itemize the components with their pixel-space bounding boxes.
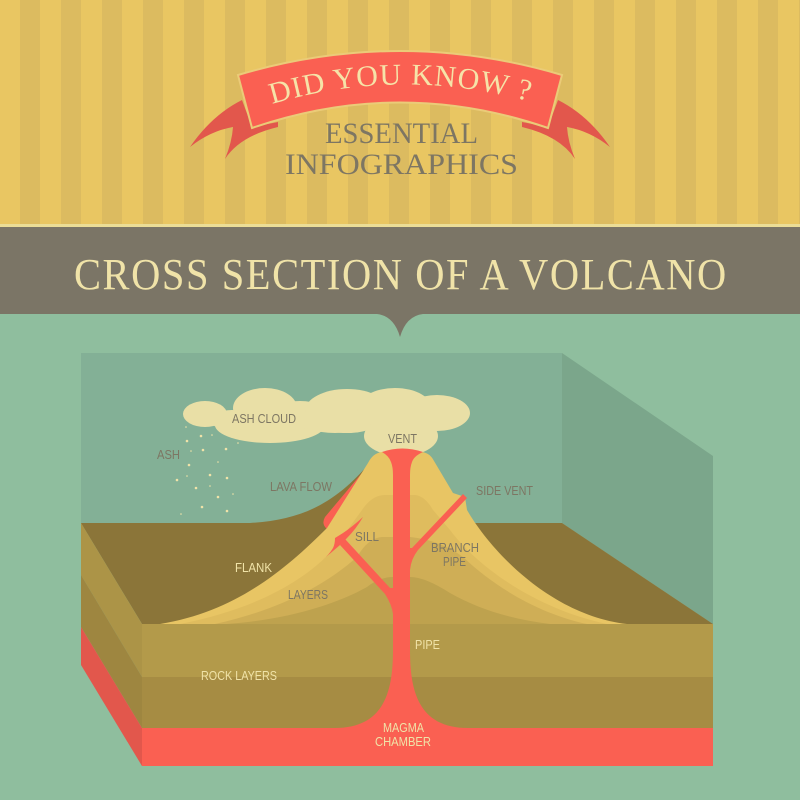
label: lava flow: LAVA FLOW (270, 480, 332, 494)
volcano second layer (180, 495, 607, 624)
magma chamber (142, 728, 713, 766)
front upper rock layer (142, 624, 713, 677)
volcano outer layer (160, 452, 627, 624)
branch pipe to side vent (410, 494, 467, 570)
ash cloud (183, 388, 470, 456)
ground surface (81, 523, 713, 624)
ash particles (176, 426, 239, 515)
label: magma chamber (375, 721, 431, 749)
volcano third layer (215, 537, 587, 624)
back wall (81, 353, 562, 523)
label: vent: VENT (388, 432, 417, 446)
label: branch pipe: BRANCH (431, 541, 479, 555)
label: side vent: SIDE VENT (476, 484, 533, 498)
lava flow (323, 461, 380, 529)
label: branch pipe: PIPE (443, 555, 466, 569)
heading: essential infographics: INFOGRAPHICS (285, 148, 518, 181)
label: magma chamber: MAGMA (383, 721, 425, 735)
ribbon text: DID YOU KNOW ? (268, 64, 532, 104)
chart: volcano cross section block (81, 353, 713, 766)
front lower rock layer (142, 677, 713, 728)
volcano inner layer (227, 577, 550, 624)
label: ash cloud: ASH CLOUD (232, 412, 296, 426)
ribbon right tail (522, 100, 610, 159)
title: CROSS SECTION OF A VOLCANO (74, 250, 726, 299)
panel: striped yellow header (0, 0, 800, 227)
label: rock layers: ROCK LAYERS (201, 669, 277, 683)
label: ash: ASH (157, 448, 180, 462)
sill (322, 517, 363, 560)
heading: essential infographics (285, 117, 518, 181)
ribbon main band (238, 51, 562, 128)
panel: title band (0, 227, 800, 337)
background hill (250, 460, 376, 523)
right wall (562, 353, 713, 624)
lower branch pipe (340, 539, 393, 614)
label: pipe: PIPE (415, 638, 440, 652)
left side lower rock layer (81, 575, 142, 728)
label: branch pipe (431, 541, 479, 569)
labels: diagram annotations (157, 412, 533, 749)
icon: did you know ribbon (190, 50, 610, 159)
heading: essential infographics: ESSENTIAL (325, 117, 478, 150)
left side upper rock layer (81, 523, 142, 677)
label: layers: LAYERS (288, 588, 328, 602)
label: magma chamber: CHAMBER (375, 735, 431, 749)
main pipe and crater (335, 448, 468, 730)
label: flank: FLANK (235, 561, 273, 575)
ribbon left tail (190, 100, 278, 159)
label: sill: SILL (355, 530, 379, 544)
left side magma layer (81, 627, 142, 766)
